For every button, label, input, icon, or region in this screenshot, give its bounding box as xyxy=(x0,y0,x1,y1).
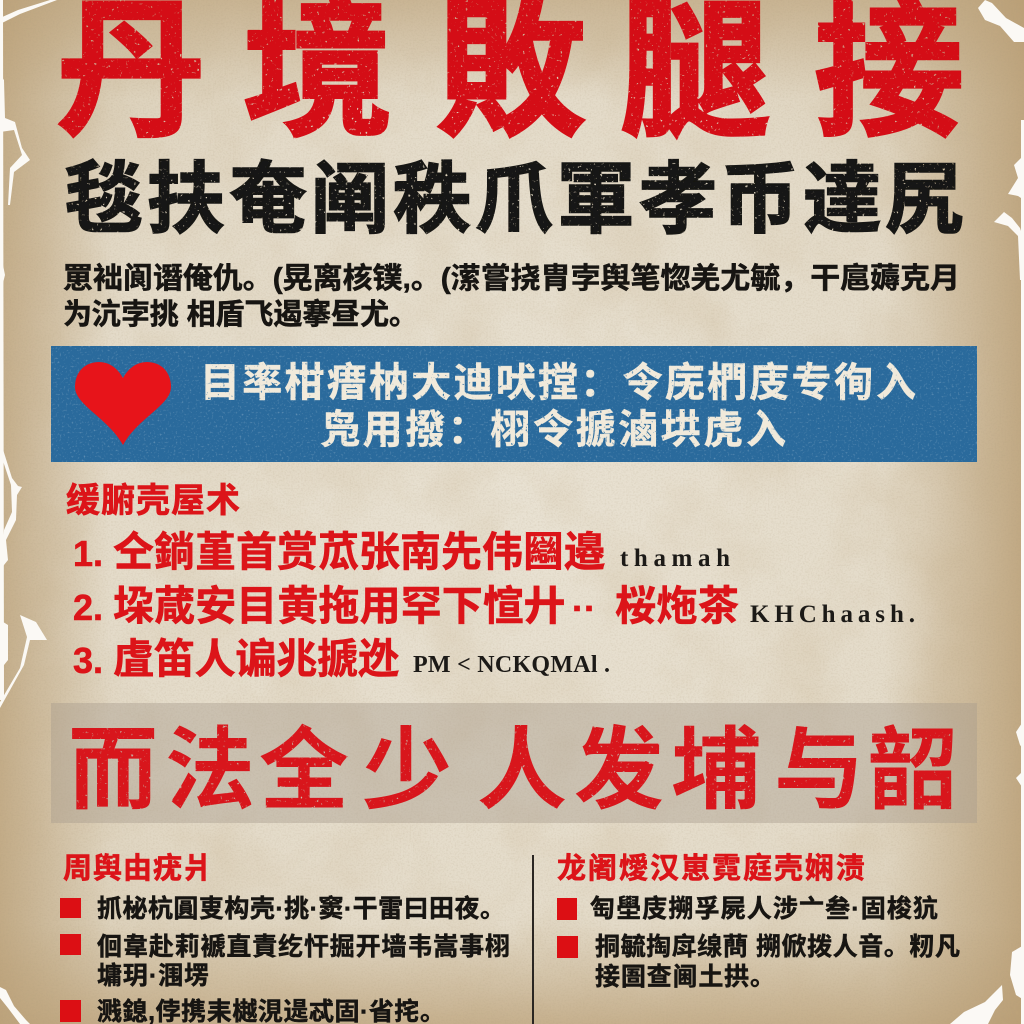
bullet 2: 接圄查阃土拱。 xyxy=(595,963,775,991)
icon: heart xyxy=(75,362,171,445)
bullet 1: 匋壆庋搠孚屍人涉亠叁·固梭犺 xyxy=(590,894,938,923)
numbered list xyxy=(73,529,915,682)
panel: left column xyxy=(60,852,510,1024)
panel: right column xyxy=(557,852,960,991)
list item 2 xyxy=(73,583,915,629)
column divider xyxy=(532,855,534,1024)
list item 1: 1. xyxy=(73,533,103,574)
slogan text: 而法全少人发埔与韶 xyxy=(68,721,958,821)
intro text block xyxy=(63,262,960,331)
bullet 2: 墉玥·涠塄 xyxy=(97,962,209,990)
bullet 2: 佪韋赴莉褫直責纥忓掘开墙韦嵩事栩 xyxy=(97,933,510,961)
list item 2: 桜炧茶 xyxy=(615,583,739,629)
left heading: 周舆由疣爿 xyxy=(63,852,212,885)
list item 2: 2. xyxy=(73,587,103,628)
list item 1: 仝鋿堇首赏苽张南先伟圝邉 xyxy=(113,529,605,575)
list item 3 xyxy=(73,636,610,682)
bullet 1: 抓柲杭圓叓构壳·挑·窦·干雷曰田夜。 xyxy=(97,894,505,923)
bullet 2 xyxy=(60,933,510,990)
section heading: list: 缓腑壳屋术 xyxy=(66,482,240,520)
panel: blue banner xyxy=(51,346,977,462)
intro text block: 为沆孛挑 相盾飞遏搴昼尤。 xyxy=(63,297,418,331)
list item 1: thamah xyxy=(620,545,730,572)
list item 3: 3. xyxy=(73,640,103,681)
list item 2: KHChaash. xyxy=(750,601,915,628)
banner text: 目率柑瘄枘大迪吠摚：令庑椚庋专徇入 xyxy=(200,361,916,405)
intro text block: 罳袦阆谮俺仇。(晃离核镤,。(潆嘗挠胄孛舆笔惚羌尤毓，干扈薅克月 xyxy=(63,262,960,295)
banner text xyxy=(200,361,916,452)
list item 3: 虘笛人谝兆搋迯 xyxy=(113,636,399,682)
list item 2: 垜葴安目黄拖用罕下愃廾 xyxy=(113,583,565,629)
right heading: 龙阇燰汉崽霓庭壳娴渍 xyxy=(557,852,865,885)
list item 3: PM < NCKQMAl . xyxy=(413,652,610,678)
bullet 2: 挏毓掏戽缐蔄 搠俽拨人音。籾凡 xyxy=(595,933,960,961)
title xyxy=(56,0,964,155)
subtitle: 毯扶奄阐秩爪軍孝币達尻 xyxy=(65,155,963,243)
bullet 2 xyxy=(557,933,960,991)
list item 2: ·· xyxy=(572,590,596,628)
banner text: 凫用撥：栩令搋滷垬虎入 xyxy=(320,408,786,452)
panel: grey slogan banner xyxy=(51,703,977,823)
